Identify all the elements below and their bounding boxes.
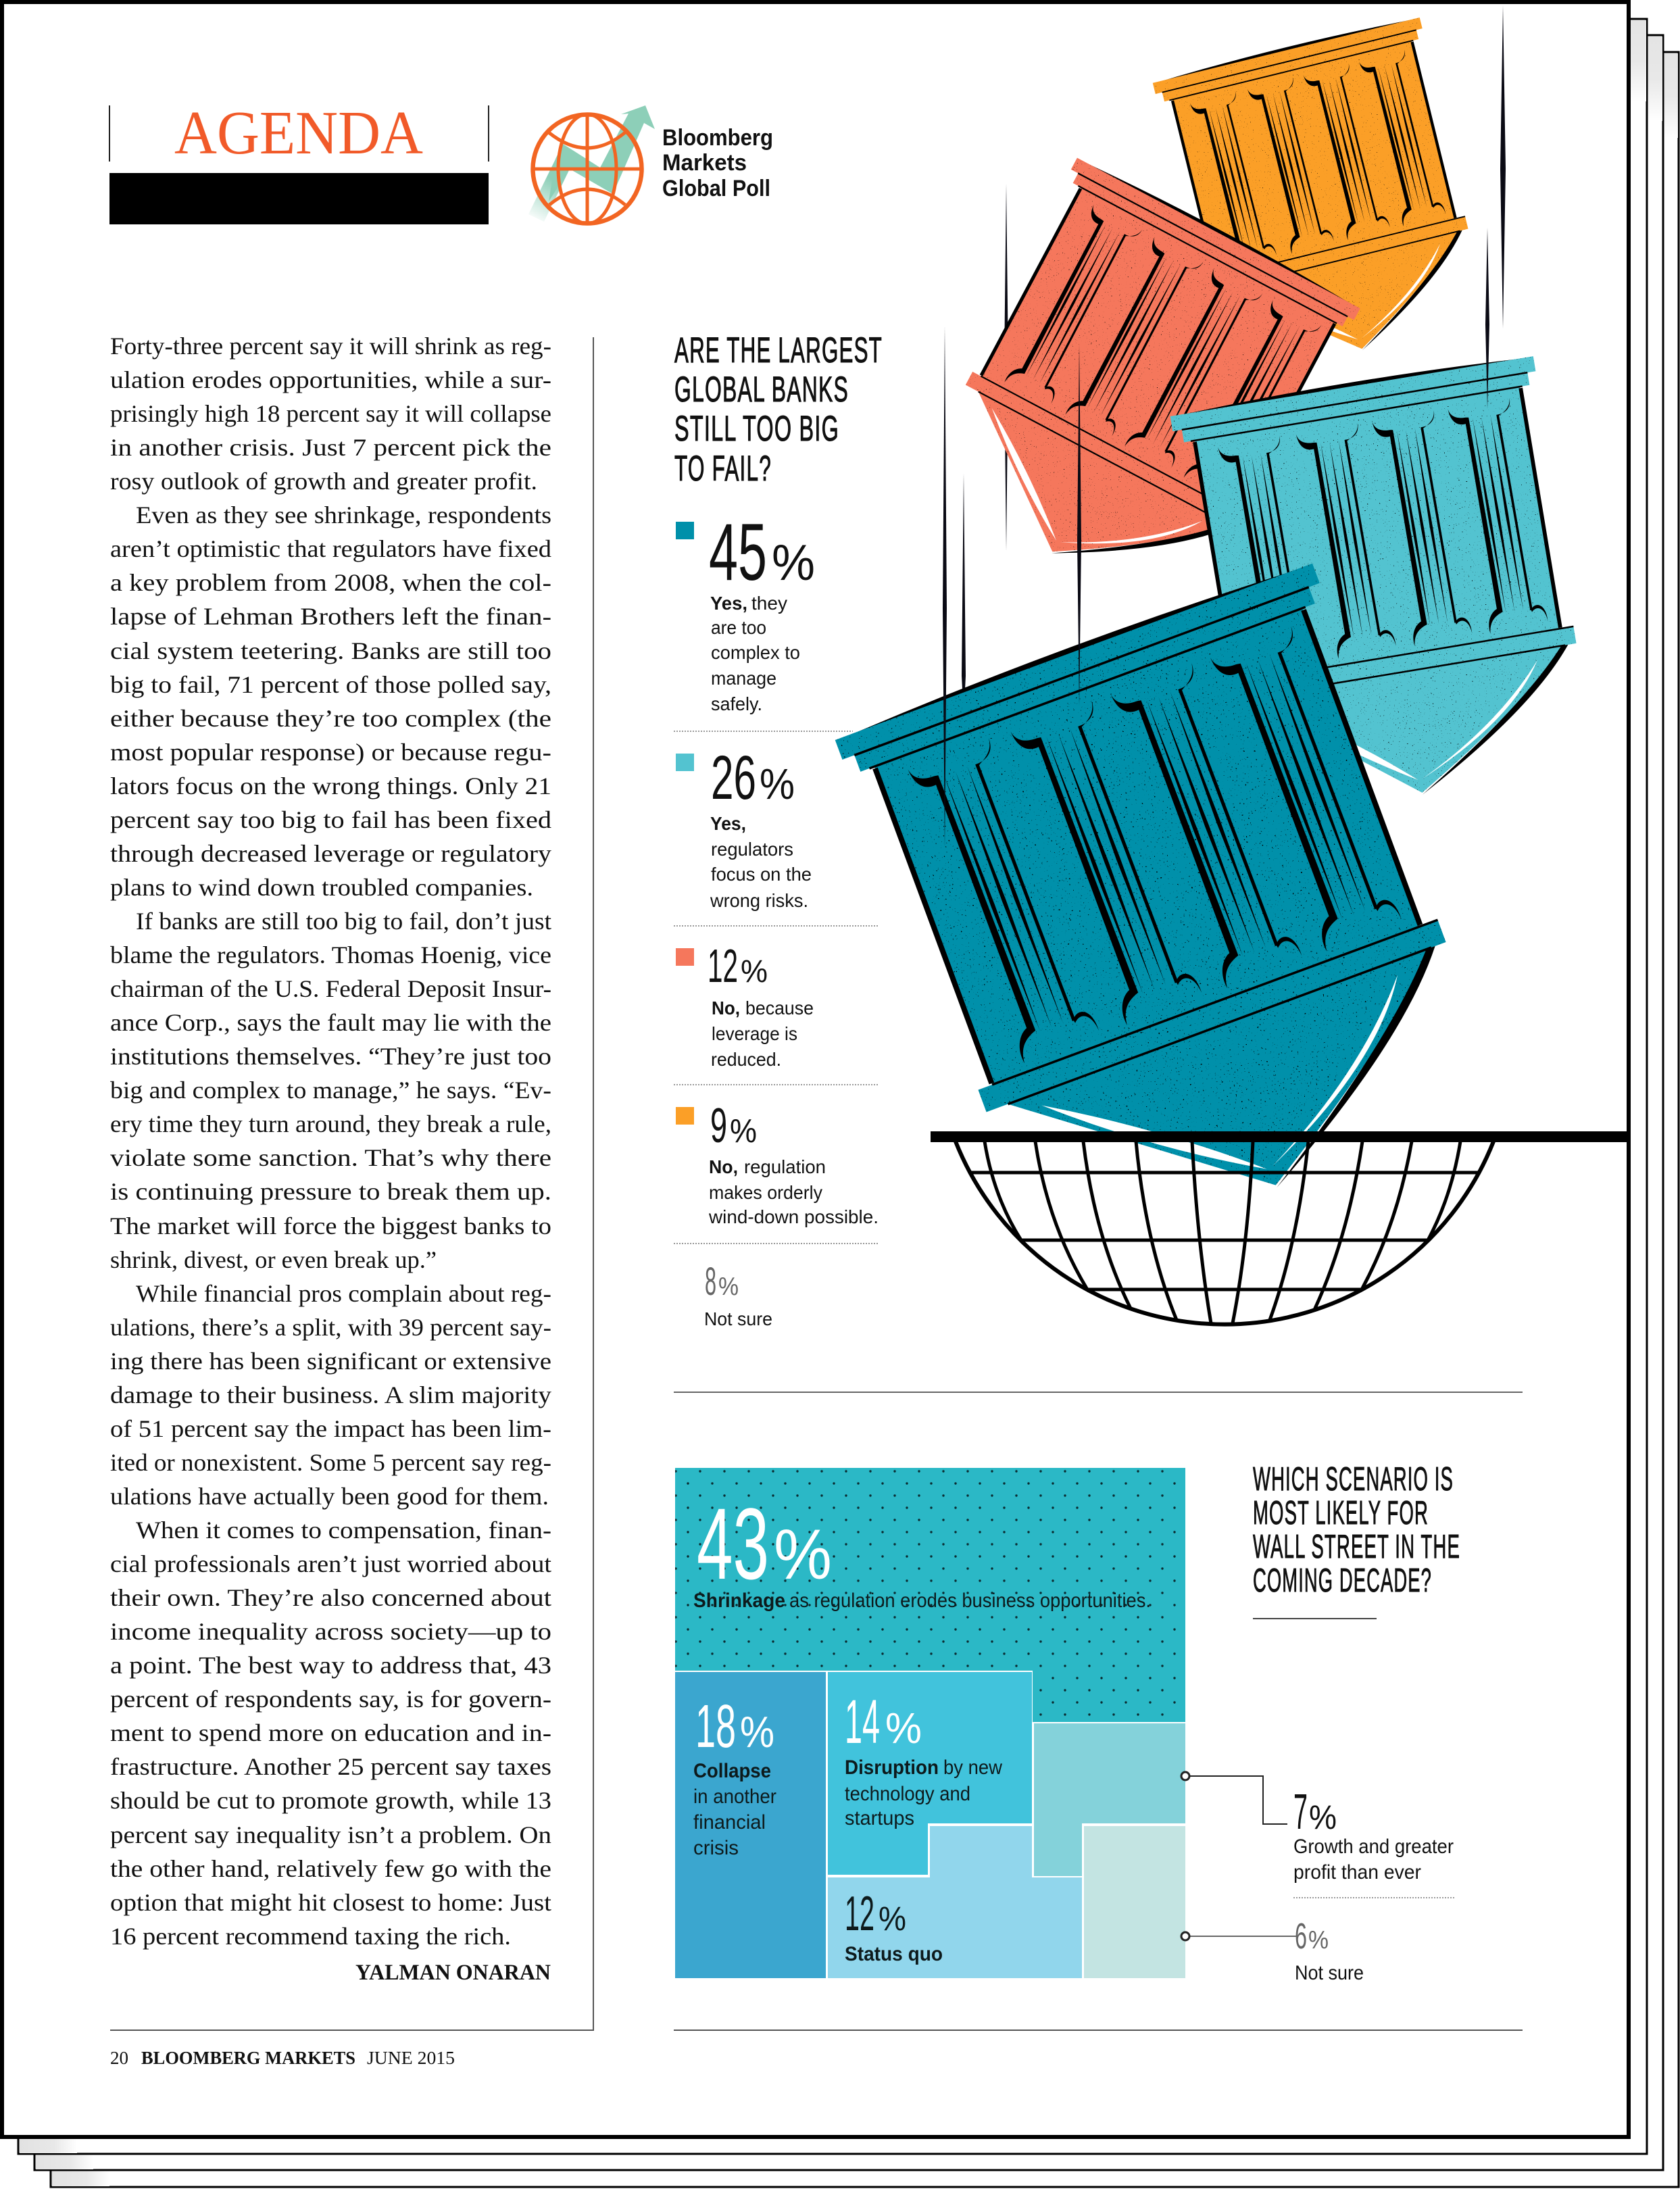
legend item: 12 percent: %	[741, 953, 768, 989]
illustration: coral bank column	[904, 152, 1365, 629]
article body text: institutions themselves. “They’re just too	[110, 1043, 551, 1070]
treemap block: 14 percent disruption: startups	[845, 1807, 914, 1829]
legend item: 26 percent: regulators	[711, 839, 793, 860]
article body text: blame the regulators. Thomas Hoenig, vice	[110, 941, 551, 968]
article body text: ulation erodes opportunities, while a sur-	[110, 366, 551, 393]
legend item: 26 percent: 26	[711, 743, 756, 812]
callout: 6 percent not sure	[1181, 1916, 1364, 1984]
callout: 7 percent growth: %	[1309, 1798, 1337, 1836]
legend item: 9 percent: %	[730, 1113, 757, 1150]
poll logo text: Global Poll	[662, 176, 770, 201]
treemap block: 14 percent disruption: by new	[943, 1756, 1002, 1779]
treemap block: 14 percent disruption: 14	[845, 1688, 880, 1756]
section label: Agenda: AGENDA	[174, 99, 423, 167]
heading: which scenario question: WALL STREET IN THE	[1253, 1529, 1460, 1565]
heading: too big to fail question: GLOBAL BANKS	[674, 370, 849, 410]
legend item: 45 percent: are too	[711, 617, 766, 638]
legend item: 12 percent: No,	[712, 998, 740, 1018]
article body text: rosy outlook of growth and greater profit.	[110, 468, 537, 495]
legend item: 45 percent: they	[751, 593, 787, 614]
article body text: shrink, divest, or even break up.”	[110, 1246, 437, 1273]
article body text: 16 percent recommend taxing the rich.	[110, 1923, 511, 1950]
article body text: cial professionals aren’t just worried about	[110, 1550, 551, 1577]
legend item: 26 percent	[676, 743, 812, 911]
treemap block: 18 percent collapse: Collapse	[693, 1760, 771, 1782]
article body text	[110, 333, 551, 1950]
article body text: should be cut to promote growth, while 13	[110, 1787, 551, 1814]
legend item: 9 percent	[676, 1099, 879, 1227]
article body text: ulations have actually been good for them.	[110, 1483, 549, 1510]
treemap block: 18 percent collapse	[675, 1672, 826, 1978]
treemap block: 12 percent status quo	[828, 1826, 1082, 1978]
article body text: plans to wind down troubled companies.	[110, 874, 533, 901]
article body text: damage to their business. A slim majority	[110, 1381, 551, 1408]
article body text: through decreased leverage or regulatory	[110, 840, 551, 867]
treemap block: 12 percent status quo: 12	[845, 1887, 874, 1941]
treemap block: 12 percent status quo: Status quo	[845, 1943, 943, 1965]
motion line: behind red column	[1004, 184, 1008, 551]
article body text: ery time they turn around, they break a rule,	[110, 1110, 551, 1137]
article body text: of 51 percent say the impact has been lim-	[110, 1415, 551, 1442]
legend: poll results	[676, 507, 879, 1329]
page footer: BLOOMBERG MARKETS	[141, 2048, 355, 2068]
heading: which scenario question	[1253, 1461, 1460, 1599]
article body text: option that might hit closest to home: Just	[110, 1889, 551, 1916]
article body text: their own. They’re also concerned about	[110, 1584, 551, 1611]
illustration: dark teal bank column	[827, 556, 1516, 1281]
article body text: aren’t optimistic that regulators have fixed	[110, 535, 551, 562]
article body text: ulations, there’s a split, with 39 percent say-	[110, 1314, 551, 1341]
article body text: income inequality across society—up to	[110, 1618, 551, 1645]
callout: 7 percent growth: profit than ever	[1293, 1861, 1421, 1884]
legend item: 26 percent: %	[760, 760, 795, 808]
article body text: is continuing pressure to break them up.	[110, 1178, 551, 1205]
heading: which scenario question: MOST LIKELY FOR	[1253, 1495, 1429, 1531]
heading: too big to fail question: TO FAIL?	[674, 449, 772, 489]
article body text: chairman of the U.S. Federal Deposit Insur-	[110, 975, 551, 1002]
callout: 6 percent not sure: Not sure	[1295, 1962, 1364, 1984]
legend item: 12 percent: because	[745, 998, 814, 1018]
article body text: ing there has been significant or extensive	[110, 1348, 551, 1375]
article body text: either because they’re too complex (the	[110, 705, 551, 732]
legend item: 12 percent	[676, 939, 814, 1070]
article body text: If banks are still too big to fail, don’t just	[136, 908, 551, 935]
callout: 7 percent growth: Growth and greater	[1293, 1836, 1454, 1858]
legend item: 45 percent	[676, 507, 815, 714]
legend item: 26 percent: wrong risks.	[710, 890, 808, 911]
icon: globe with rising arrow	[528, 105, 655, 224]
legend item: 26 percent: focus on the	[711, 864, 812, 885]
illustration: orange bank column	[1149, 14, 1496, 385]
legend item: 9 percent: No,	[709, 1156, 738, 1177]
legend item: 12 percent: reduced.	[711, 1049, 781, 1070]
article body text: percent say too big to fail has been fixed	[110, 806, 551, 833]
motion line: middle	[1077, 344, 1081, 706]
motion line: over top right	[1500, 5, 1506, 328]
treemap block: 43 percent shrinkage: as regulation erodes business opportunities.	[789, 1590, 1151, 1612]
treemap block: 43 percent shrinkage: Shrinkage	[693, 1590, 785, 1612]
legend item: 45 percent: safely.	[711, 693, 762, 714]
legend item: 9 percent: 9	[710, 1099, 727, 1153]
legend item: 12 percent: leverage is	[712, 1023, 797, 1044]
treemap block: 14 percent disruption: technology and	[845, 1783, 970, 1805]
legend item: 26 percent: Yes,	[710, 813, 746, 834]
legend item: 9 percent: wind-down possible.	[708, 1206, 879, 1227]
article body text: lapse of Lehman Brothers left the finan-	[110, 603, 551, 630]
treemap block: 14 percent disruption: %	[885, 1704, 922, 1752]
poll logo text: Markets	[662, 150, 747, 176]
treemap block: 43 percent shrinkage	[675, 1468, 1185, 1722]
article body text: lators focus on the wrong things. Only 21	[110, 772, 551, 800]
article body text: percent say inequality isn’t a problem. On	[110, 1821, 551, 1848]
treemap block: 18 percent collapse: financial	[693, 1811, 766, 1834]
legend item: 9 percent: regulation	[744, 1156, 826, 1177]
legend item: 9 percent: makes orderly	[709, 1182, 822, 1203]
article body text: the other hand, relatively few go with the	[110, 1855, 551, 1882]
callout: 7 percent growth: 7	[1293, 1784, 1308, 1840]
page footer: JUNE 2015	[367, 2048, 455, 2068]
illustration: light teal bank column	[1165, 351, 1605, 827]
treemap block: 18 percent collapse: 18	[695, 1693, 736, 1761]
article body text: violate some sanction. That’s why there	[110, 1144, 551, 1171]
treemap: Wall Street scenarios	[675, 1468, 1185, 1978]
page footer: 20	[110, 2048, 128, 2068]
poll logo text: Bloomberg	[662, 125, 773, 151]
shelf bar	[931, 1131, 1629, 1142]
article body text: percent of respondents say, is for govern-	[110, 1686, 551, 1713]
legend item: 45 percent: 45	[709, 507, 767, 597]
treemap block: 6 percent not sure	[1084, 1826, 1185, 1978]
article body text: cial system teetering. Banks are still too	[110, 637, 551, 664]
article body text: When it comes to compensation, finan-	[136, 1517, 551, 1544]
article body text: ance Corp., says the fault may lie with the	[110, 1009, 551, 1036]
legend item: 8 percent not sure: Not sure	[704, 1308, 772, 1329]
article body text: Forty-three percent say it will shrink as reg-	[110, 333, 551, 360]
treemap block: 14 percent disruption	[828, 1672, 1032, 1875]
article body text: most popular response) or because regu-	[110, 739, 551, 766]
article body text: big and complex to manage,” he says. “Ev-	[110, 1077, 551, 1104]
treemap block: 18 percent collapse: crisis	[693, 1837, 739, 1859]
article byline: YALMAN ONARAN	[355, 1961, 551, 1985]
poll logo text	[662, 125, 773, 201]
callout: 6 percent not sure: 6	[1295, 1916, 1307, 1957]
treemap block: 7 percent growth	[1034, 1723, 1185, 1876]
article body text: frastructure. Another 25 percent say taxes	[110, 1753, 551, 1780]
article body text: ited or nonexistent. Some 5 percent say reg-	[110, 1449, 551, 1476]
treemap block: 14 percent disruption: Disruption	[845, 1756, 939, 1779]
article body text: While financial pros complain about reg-	[136, 1280, 551, 1307]
motion line: long left	[943, 326, 947, 848]
heading: which scenario question: WHICH SCENARIO IS	[1253, 1461, 1454, 1498]
motion line: over light teal column	[1485, 228, 1489, 409]
icon: half globe net	[956, 1141, 1493, 1325]
article body text: The market will force the biggest banks to	[110, 1212, 551, 1239]
article body text: in another crisis. Just 7 percent pick the	[110, 434, 551, 461]
legend item: 8 percent not sure: 8	[705, 1260, 716, 1304]
treemap block: 18 percent collapse: %	[740, 1707, 774, 1756]
motion line: behind dark teal column	[962, 473, 966, 716]
column rules	[110, 337, 593, 2030]
heading: too big to fail question	[674, 330, 883, 489]
legend item: 8 percent not sure	[704, 1260, 772, 1329]
heading: too big to fail question: STILL TOO BIG	[674, 409, 839, 449]
callout: 7 percent growth	[1181, 1772, 1454, 1884]
legend item: 45 percent: complex to	[711, 642, 800, 663]
article body text: prisingly high 18 percent say it will collapse	[110, 400, 551, 427]
black header bar	[109, 173, 489, 224]
treemap block: 43 percent shrinkage: 43	[697, 1487, 769, 1600]
article body text: a point. The best way to address that, 43	[110, 1652, 551, 1679]
heading: too big to fail question: ARE THE LARGEST	[674, 330, 883, 370]
heading: which scenario question: COMING DECADE?	[1253, 1563, 1432, 1599]
article body text: big to fail, 71 percent of those polled say,	[110, 671, 551, 698]
legend item: 45 percent: manage	[711, 668, 776, 689]
legend item: 8 percent not sure: %	[718, 1273, 739, 1301]
treemap block: 43 percent shrinkage: %	[774, 1515, 832, 1594]
treemap block: 12 percent status quo: %	[879, 1900, 906, 1938]
article body text: Even as they see shrinkage, respondents	[136, 501, 551, 528]
legend item: 45 percent: Yes,	[710, 593, 747, 614]
article body text: ment to spend more on education and in-	[110, 1719, 551, 1746]
legend item: 12 percent: 12	[708, 939, 738, 992]
callout: 6 percent not sure: %	[1308, 1926, 1329, 1954]
treemap block: 18 percent collapse: in another	[693, 1786, 776, 1808]
legend item: 45 percent: %	[772, 534, 815, 591]
article body text: a key problem from 2008, when the col-	[110, 569, 551, 596]
page footer	[110, 2048, 455, 2068]
